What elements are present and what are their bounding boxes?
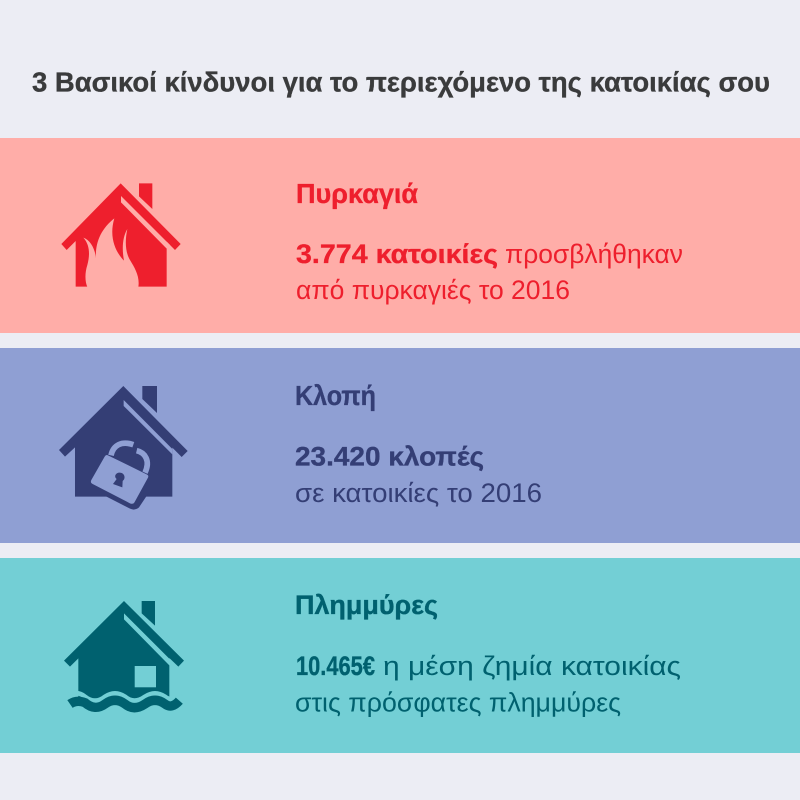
text: flood statistic: η μέση ζημία κατοικίας <box>383 651 681 681</box>
text: fire statistic: 3.774 κατοικίες <box>296 239 498 269</box>
heading: fire: Πυρκαγιά <box>296 178 418 209</box>
text: fire statistic: από πυρκαγιές το 2016 <box>296 275 570 305</box>
text: flood statistic: στις πρόσφατες πλημμύρες <box>295 688 621 718</box>
panel: floods <box>0 558 800 753</box>
icon: flooded house <box>64 601 184 708</box>
text: theft statistic: σε κατοικίες το 2016 <box>295 478 542 508</box>
text: theft statistic: 23.420 κλοπές <box>295 442 484 472</box>
icon: house on fire <box>61 183 181 287</box>
text: fire statistic: προσβλήθηκαν <box>505 239 683 269</box>
panel: fire <box>0 138 800 333</box>
heading: floods: Πλημμύρες <box>295 590 438 620</box>
text: flood statistic: 10.465€ <box>296 651 375 681</box>
text: fire statistic <box>296 239 683 305</box>
text: theft statistic <box>295 442 542 508</box>
heading: theft: Κλοπή <box>295 380 376 411</box>
text: flood statistic <box>295 651 681 718</box>
icon: house with padlock <box>59 386 188 510</box>
panel: theft <box>0 348 800 543</box>
title: 3 Βασικοί κίνδυνοι για το περιεχόμενο της κατοικίας σου <box>32 66 770 98</box>
